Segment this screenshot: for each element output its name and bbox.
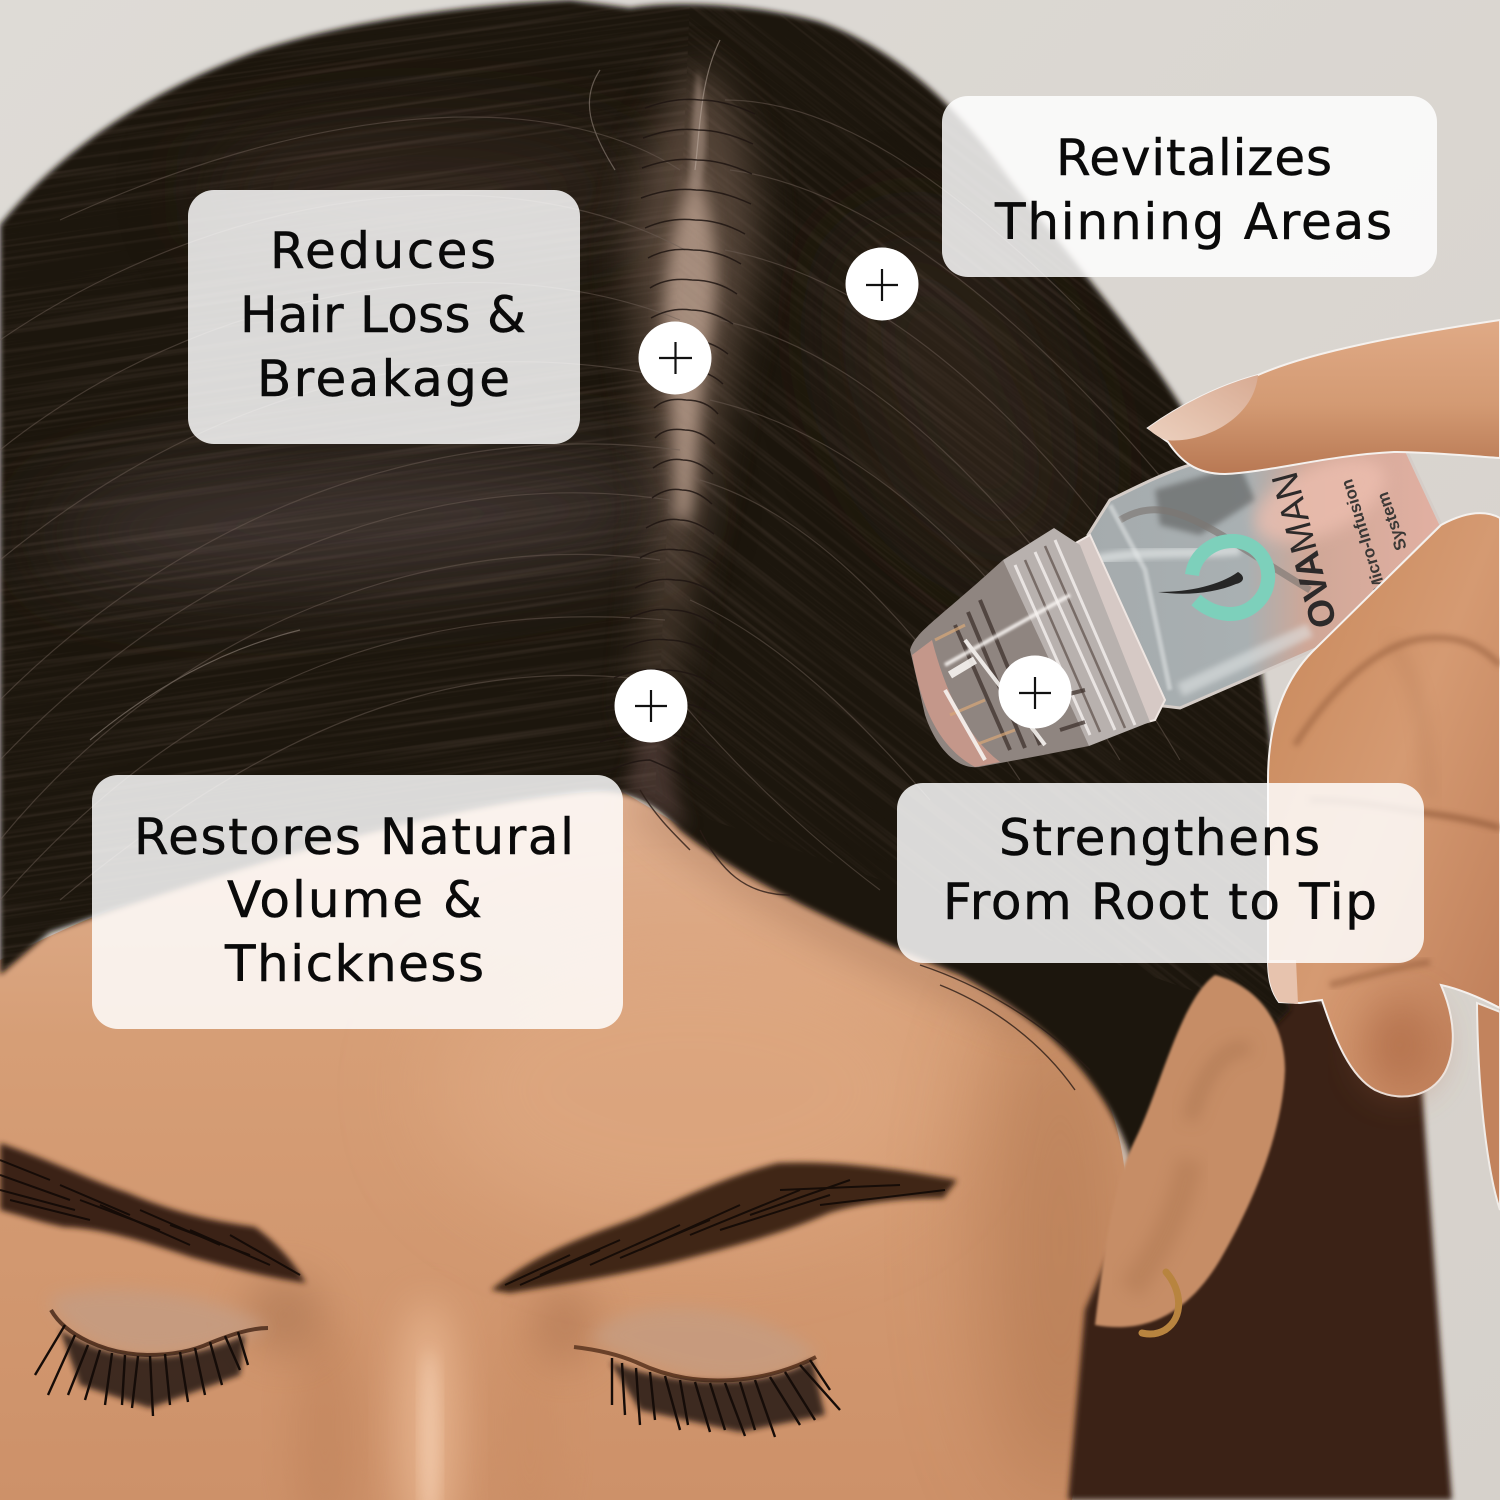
face — [0, 790, 1140, 1500]
label text: Thickness — [224, 935, 484, 993]
icon: plus marker on thinning area — [846, 248, 918, 320]
lower nail — [1268, 960, 1298, 1004]
right eye socket — [533, 1285, 597, 1365]
finger creases — [1295, 638, 1500, 985]
index finger — [1148, 320, 1500, 474]
lower fingers — [1268, 513, 1500, 1096]
label text: Thinning Areas — [994, 193, 1392, 251]
scalp parting — [625, 60, 756, 830]
fingertip shadow — [1364, 1000, 1436, 1090]
brand name: OVAMAN — [1264, 468, 1345, 633]
streak texture left — [2, 8, 689, 957]
glass body — [1088, 450, 1441, 708]
left eye socket — [245, 1275, 325, 1355]
streak texture right — [666, 8, 1290, 1006]
hair shine left — [37, 443, 683, 597]
ear — [1095, 975, 1285, 1327]
label text: From Root to Tip — [943, 873, 1377, 931]
left eyebrow — [0, 1143, 306, 1283]
label text: Volume & — [227, 871, 482, 929]
roller head — [910, 560, 1089, 767]
brand logo — [1158, 541, 1268, 614]
hair shine right — [851, 246, 1069, 554]
hairline shade — [640, 800, 1040, 1020]
label text — [134, 808, 574, 993]
label text — [240, 222, 526, 408]
icon: plus marker on bottle — [998, 656, 1072, 728]
icon: plus marker on scalp parting — [638, 322, 712, 394]
hair strands — [0, 40, 1210, 900]
flyaway baby hairs — [640, 790, 1090, 1090]
panel: strengthens root to tip — [897, 783, 1424, 963]
hand holding bottle — [1148, 320, 1500, 1210]
hair shine upper — [238, 126, 602, 226]
label text: Strengthens — [999, 809, 1320, 867]
lower hair behind the ear — [1068, 950, 1452, 1500]
panel: reduces hair loss — [188, 190, 580, 444]
left eyelid and lashes — [35, 1290, 268, 1416]
product bottle — [910, 440, 1441, 767]
panel: restores natural volume — [92, 775, 623, 1029]
earring — [1142, 1272, 1179, 1334]
panel: revitalizes thinning areas — [942, 96, 1437, 277]
right temple shade — [980, 980, 1140, 1500]
product descriptor: Micro-Infusion — [1337, 477, 1390, 594]
fine hairs over the parting — [600, 99, 755, 790]
label text: Revitalizes — [1056, 129, 1332, 187]
label text: Restores Natural — [134, 808, 574, 866]
forehead highlight — [430, 940, 950, 1240]
label text — [943, 809, 1377, 931]
fingernail — [1148, 375, 1258, 440]
right eyebrow — [491, 1162, 957, 1293]
hair — [0, 0, 1292, 1158]
label text — [994, 129, 1392, 251]
nose — [293, 1300, 562, 1500]
back finger — [1477, 1003, 1500, 1210]
right eyelid and lashes — [574, 1308, 840, 1437]
collar — [1072, 535, 1165, 728]
label text: Hair Loss & — [240, 286, 526, 344]
roller cap — [1003, 528, 1150, 746]
label text: Breakage — [257, 350, 510, 408]
body highlights — [1095, 440, 1398, 690]
product descriptor: System — [1373, 490, 1411, 553]
label text: Reduces — [270, 222, 496, 280]
icon: plus marker on hairline — [614, 670, 688, 742]
